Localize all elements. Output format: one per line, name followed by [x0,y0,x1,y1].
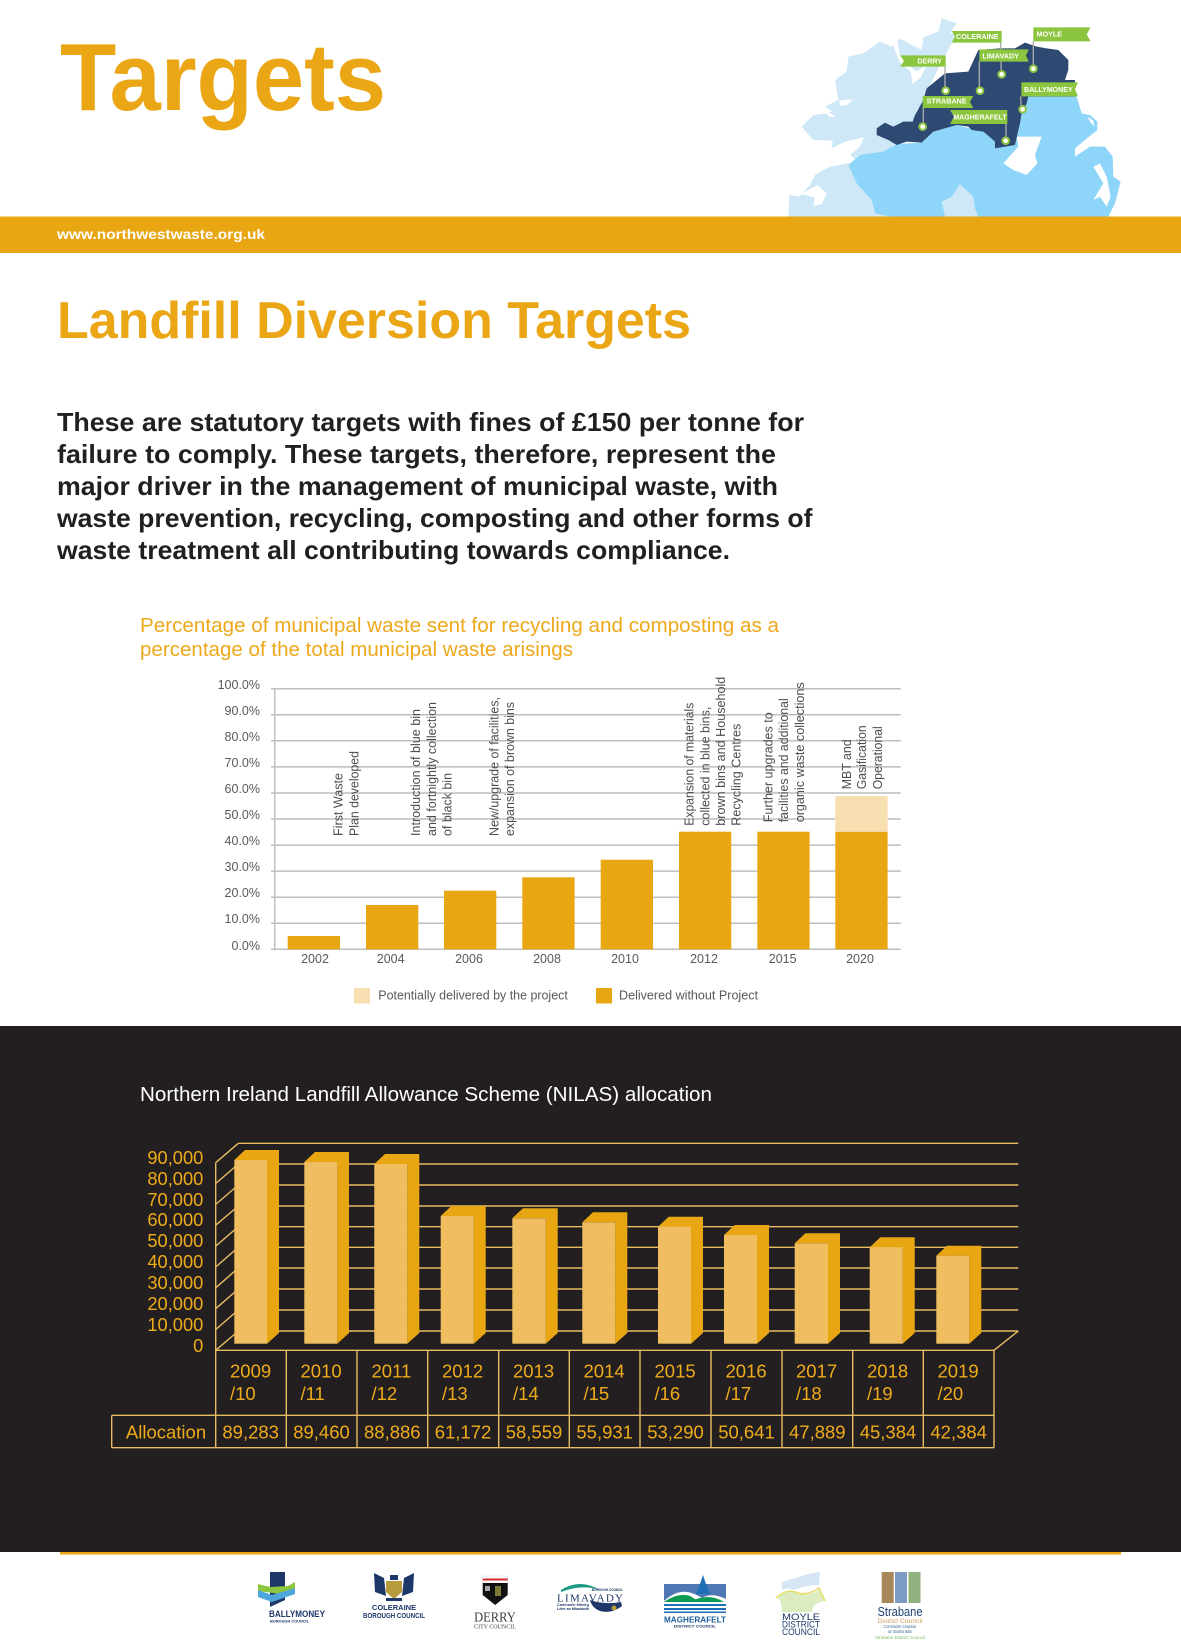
flag: Magherafelt [950,110,1010,145]
y axis labels: 20,000 [147,1293,203,1314]
milestone note: expansion of materials: Expansion of materials [681,702,696,826]
chart title: recycling percentage: percentage of the total municipal waste arisings [140,639,573,661]
year labels: 2016 [726,1361,767,1382]
logo: Limavady: LIMAVADY [557,1593,623,1605]
allocation row: 45,384 [860,1421,916,1442]
x axis labels: 2006 [455,952,483,966]
allocation row: Allocation [126,1421,206,1442]
allocation row: 88,886 [364,1421,421,1442]
y axis labels: 10,000 [147,1314,203,1335]
year labels: /14 [513,1383,539,1404]
y axis labels: 80,000 [147,1168,203,1189]
flag: Ballymoney [1018,82,1078,114]
y axis labels [218,678,260,953]
x axis labels: 2004 [377,952,405,966]
milestone note: blue bin: of black bin [440,773,455,836]
milestone note: MBT and gasification: Gasification [854,725,869,789]
milestone note: blue bin: Introduction of blue bin [408,709,423,836]
heading: Landfill Diversion Targets: Landfill Diversion Targets [57,292,691,350]
y axis labels: 30,000 [147,1272,203,1293]
logo: Moyle: COUNCIL [782,1627,820,1638]
milestone note: First Waste Plan: First Waste [331,773,346,836]
milestone note: blue bin [408,702,455,836]
bars [288,796,888,949]
flag: Magherafelt: MAGHERAFELT [953,114,1007,121]
milestone note: further upgrades: organic waste collections [792,682,807,822]
year labels: /12 [372,1383,397,1404]
title: Targets [60,24,386,131]
y axis labels: 50.0% [225,808,260,822]
logo: Coleraine: BOROUGH COUNCIL [363,1613,426,1620]
logo: Strabane: Strabane [878,1604,922,1619]
milestone note: MBT and gasification: Operational [870,726,885,789]
flag: Coleraine [952,31,1006,79]
x axis labels: 2002 [301,952,329,966]
logo: Limavady: BOROUGH COUNCIL [592,1588,624,1592]
y axis labels: 10.0% [225,912,260,926]
year labels: 2017 [796,1361,837,1382]
dark panel: NILAS allocation [0,1026,1181,1552]
year labels: /16 [654,1383,680,1404]
x axis labels: 2010 [611,952,639,966]
chart title: recycling percentage: Percentage of municipal waste sent for recycling and composting as a [140,615,780,637]
logo: Magherafelt: DISTRICT COUNCIL [674,1624,717,1628]
y axis labels: 40,000 [147,1251,203,1272]
milestone note: MBT and gasification [839,725,885,789]
y axis labels [147,1147,203,1356]
allocation row: 89,460 [293,1421,350,1442]
logo: Limavady: Léim an Mhadaidh [557,1607,589,1611]
logo: Magherafelt [664,1575,727,1628]
year labels: 2015 [654,1361,696,1382]
header band with website [0,216,1181,253]
year labels: /18 [796,1383,822,1404]
intro text block: waste treatment all contributing towards compliance. [56,535,730,565]
logo: Ballymoney: BOROUGH COUNCIL [270,1618,310,1624]
chart legend: Potentially delivered by the project [378,988,568,1002]
milestone note: expansion of materials [681,677,744,826]
year labels: /17 [726,1383,751,1404]
y axis labels: 0 [193,1335,203,1356]
allocation row: 61,172 [435,1421,491,1442]
flag: Ballymoney: BALLYMONEY [1024,87,1073,94]
intro text block: failure to comply. These targets, therefore, represent the [57,439,776,469]
milestone note: expansion of materials: brown bins and Household [713,677,728,826]
milestone note: brown bins [486,697,517,836]
logo: Strabane: an tSratha Báin [888,1629,912,1634]
flag: Limavady [976,49,1029,95]
logo: Strabane: District Council [878,1618,923,1625]
y axis labels: 80.0% [225,730,260,744]
allocation row [126,1421,987,1442]
x axis labels: 2008 [533,952,561,966]
year labels: 2009 [230,1361,271,1382]
logo: Ballymoney [258,1572,325,1624]
allocation row: 55,931 [576,1421,633,1442]
intro text block: waste prevention, recycling, composting and other forms of [56,503,813,533]
logo: Magherafelt: MAGHERAFELT [664,1615,727,1625]
y axis labels: 0.0% [232,939,260,953]
logo: Derry: DERRY [474,1611,516,1626]
year labels: /20 [938,1383,963,1404]
intro text block [56,407,813,565]
logo: Moyle: DISTRICT [782,1620,820,1630]
Strangford Lough [1093,163,1111,207]
intro text block: These are statutory targets with fines of £150 per tonne for [57,407,804,437]
year labels: 2010 [300,1361,342,1382]
milestone note: brown bins: New/upgrade of facilities, [486,697,501,836]
3D bar chart frame [216,1143,1018,1448]
y axis labels: 40.0% [225,834,260,848]
year labels: 2013 [513,1361,554,1382]
allocation row: 47,889 [789,1421,846,1442]
allocation row: 42,384 [930,1421,987,1442]
chart legend: Delivered without Project [619,988,758,1002]
milestone note: First Waste Plan: Plan developed [347,751,362,836]
data table [112,1350,994,1448]
allocation row: 50,641 [718,1421,775,1442]
year labels: /13 [442,1383,468,1404]
y axis labels: 50,000 [147,1230,203,1251]
footer rule [60,1552,1121,1554]
year labels: /15 [584,1383,609,1404]
flag: Limavady: LIMAVADY [982,53,1019,60]
milestone note: further upgrades: facilities and additional [776,698,791,822]
year labels: 2011 [372,1361,411,1382]
Lough Neagh [1003,137,1042,175]
milestone note: blue bin: and fortnightly collection [424,702,439,836]
year labels: /19 [867,1383,893,1404]
south border patch [942,184,978,217]
year labels: 2014 [584,1361,625,1382]
logo: Coleraine: COLERAINE [372,1603,416,1612]
flag: Derry [900,55,950,95]
logo: Limavady [557,1584,624,1612]
milestone note: further upgrades: Further upgrades to [760,712,775,822]
x axis labels [301,952,874,966]
milestone note: expansion of materials: Recycling Centres [729,723,744,826]
milestone note: MBT and gasification: MBT and [839,739,854,789]
allocation row: 89,283 [222,1421,279,1442]
y axis labels: 90.0% [225,704,260,718]
y axis labels: 60,000 [147,1209,203,1230]
intro text block: major driver in the management of municipal waste, with [57,471,778,501]
allocation row: 53,290 [647,1421,704,1442]
bar chart: recycling and composting [218,677,901,966]
allocation row: 58,559 [506,1421,562,1442]
logo: Coleraine [363,1573,426,1620]
logo: Moyle [776,1572,825,1638]
y axis labels: 70,000 [147,1189,203,1210]
y axis labels: 100.0% [218,678,260,692]
y axis labels: 30.0% [225,860,260,874]
x axis labels: 2012 [690,952,718,966]
flag: Coleraine: COLERAINE [956,34,999,41]
logo: Strabane [875,1572,925,1640]
chart title: NILAS: Northern Ireland Landfill Allowance Scheme (NILAS) allocation [140,1084,712,1106]
milestone note: First Waste Plan [331,751,362,836]
milestone note: brown bins: expansion of brown bins [502,702,517,836]
year labels: 2012 [442,1361,483,1382]
y axis labels: 90,000 [147,1147,203,1168]
logo: Strabane: Comhairle Ceantair [884,1624,917,1629]
mid-blue eastern area [848,97,1121,217]
year labels [230,1361,979,1404]
logo: Derry: CITY COUNCIL [474,1624,516,1630]
year labels: 2019 [938,1361,979,1382]
header band with website: www.northwestwaste.org.uk [56,226,265,242]
logo: Derry [474,1576,516,1630]
x axis labels: 2020 [846,952,874,966]
y axis labels: 70.0% [225,756,260,770]
milestone note: further upgrades [760,682,807,822]
year labels: 2018 [867,1361,908,1382]
milestone note: expansion of materials: collected in blue bins, [697,707,712,826]
logo: Ballymoney: BALLYMONEY [269,1609,325,1619]
map of the North West region [788,18,1121,217]
flag: Strabane [918,96,973,131]
flag: Moyle [1029,27,1091,73]
logo: Limavady: Comhairle Mheirg [557,1603,589,1607]
y axis labels: 60.0% [225,782,260,796]
flag: Moyle: MOYLE [1037,31,1062,38]
logo: Moyle: MOYLE [782,1612,820,1623]
chart title: recycling percentage [140,615,780,661]
flag: Derry: DERRY [917,58,942,65]
chart legend [354,988,758,1004]
x axis labels: 2015 [769,952,797,966]
3D bars [234,1150,981,1344]
year labels: /11 [300,1383,325,1404]
year labels: /10 [230,1383,256,1404]
dark council area [877,43,1075,148]
flag: Strabane: STRABANE [927,98,967,105]
logo: Strabane: Strabane District Council [875,1635,925,1640]
y axis labels: 20.0% [225,886,260,900]
